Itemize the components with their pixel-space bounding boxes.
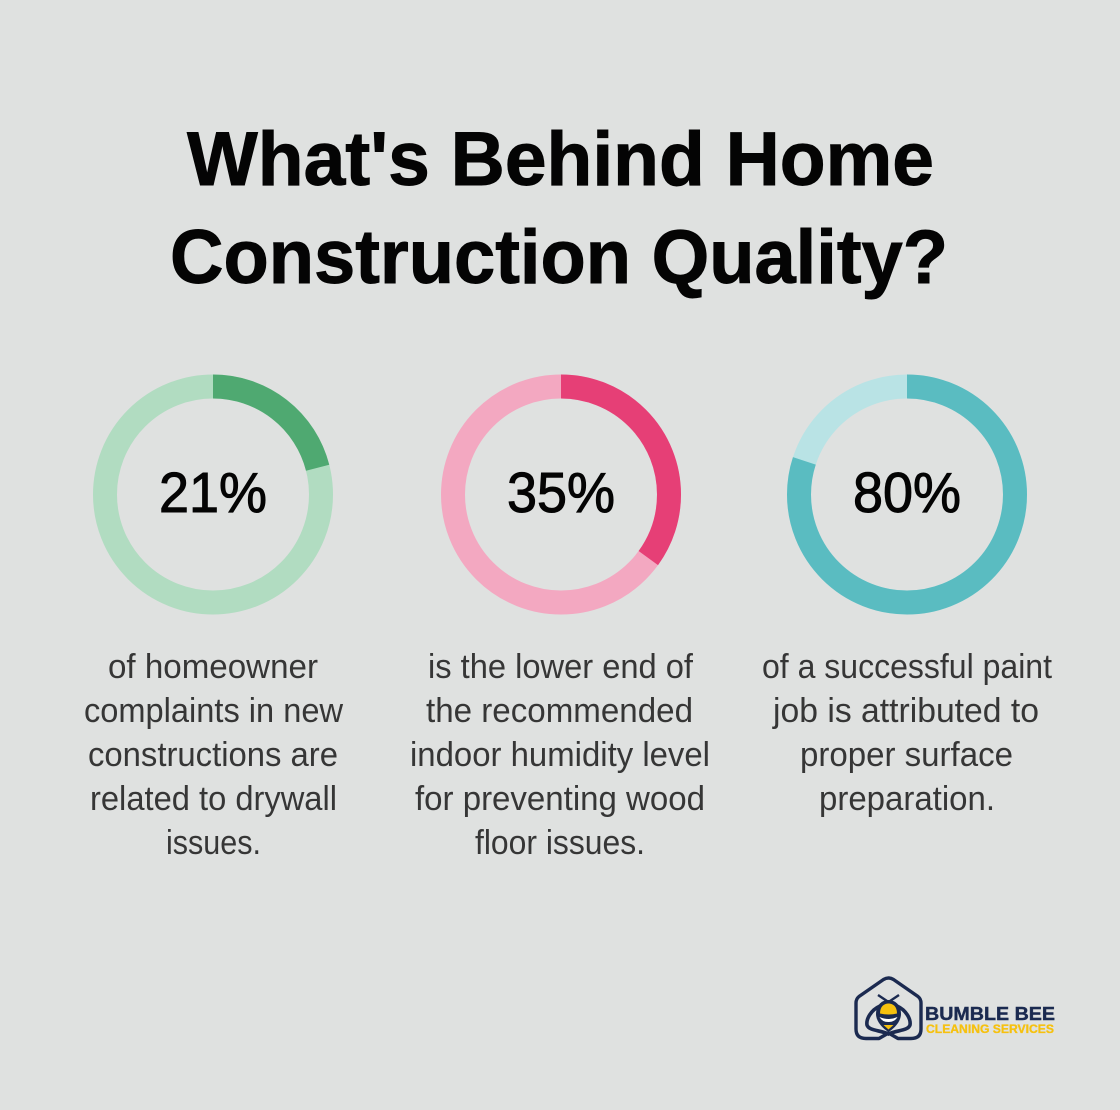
description: humidity: indoor humidity level (410, 736, 710, 774)
icon: bee in house (856, 978, 921, 1038)
panel: indoor humidity (410, 386, 710, 862)
panel: drywall complaints (84, 386, 343, 862)
description: humidity: the recommended (426, 692, 693, 730)
logo tagline: CLEANING SERVICES (926, 1024, 1054, 1036)
title: What's Behind Home (187, 117, 934, 202)
description: drywall: constructions are (88, 736, 338, 774)
logo wordmark: BUMBLE BEE (925, 1003, 1055, 1024)
description: humidity: floor issues. (475, 824, 645, 862)
description: paint job: preparation. (819, 780, 995, 818)
panel: surface preparation (762, 386, 1053, 818)
description: drywall: complaints in new (84, 692, 343, 730)
donut chart: 35% (453, 386, 669, 602)
description: drywall: issues. (166, 824, 261, 862)
stat: 21%: 21% (159, 461, 267, 525)
description: drywall: of homeowner (108, 648, 318, 686)
logo: Bumble Bee Cleaning Services (856, 978, 1055, 1038)
donut chart: 80% (799, 386, 1015, 602)
description: paint job (762, 648, 1053, 818)
description: paint job: proper surface (800, 736, 1013, 774)
description: drywall: related to drywall (90, 780, 337, 818)
description: humidity: is the lower end of (428, 648, 694, 686)
donut chart: 21% (105, 386, 321, 602)
stat: 35%: 35% (507, 461, 615, 525)
title (170, 117, 948, 300)
description: paint job: job is attributed to (772, 692, 1039, 730)
description: paint job: of a successful paint (762, 648, 1053, 686)
stat: 80%: 80% (853, 461, 961, 525)
description: humidity (410, 648, 710, 862)
description: humidity: for preventing wood (415, 780, 705, 818)
title: Construction Quality? (170, 215, 948, 300)
description: drywall (84, 648, 343, 862)
